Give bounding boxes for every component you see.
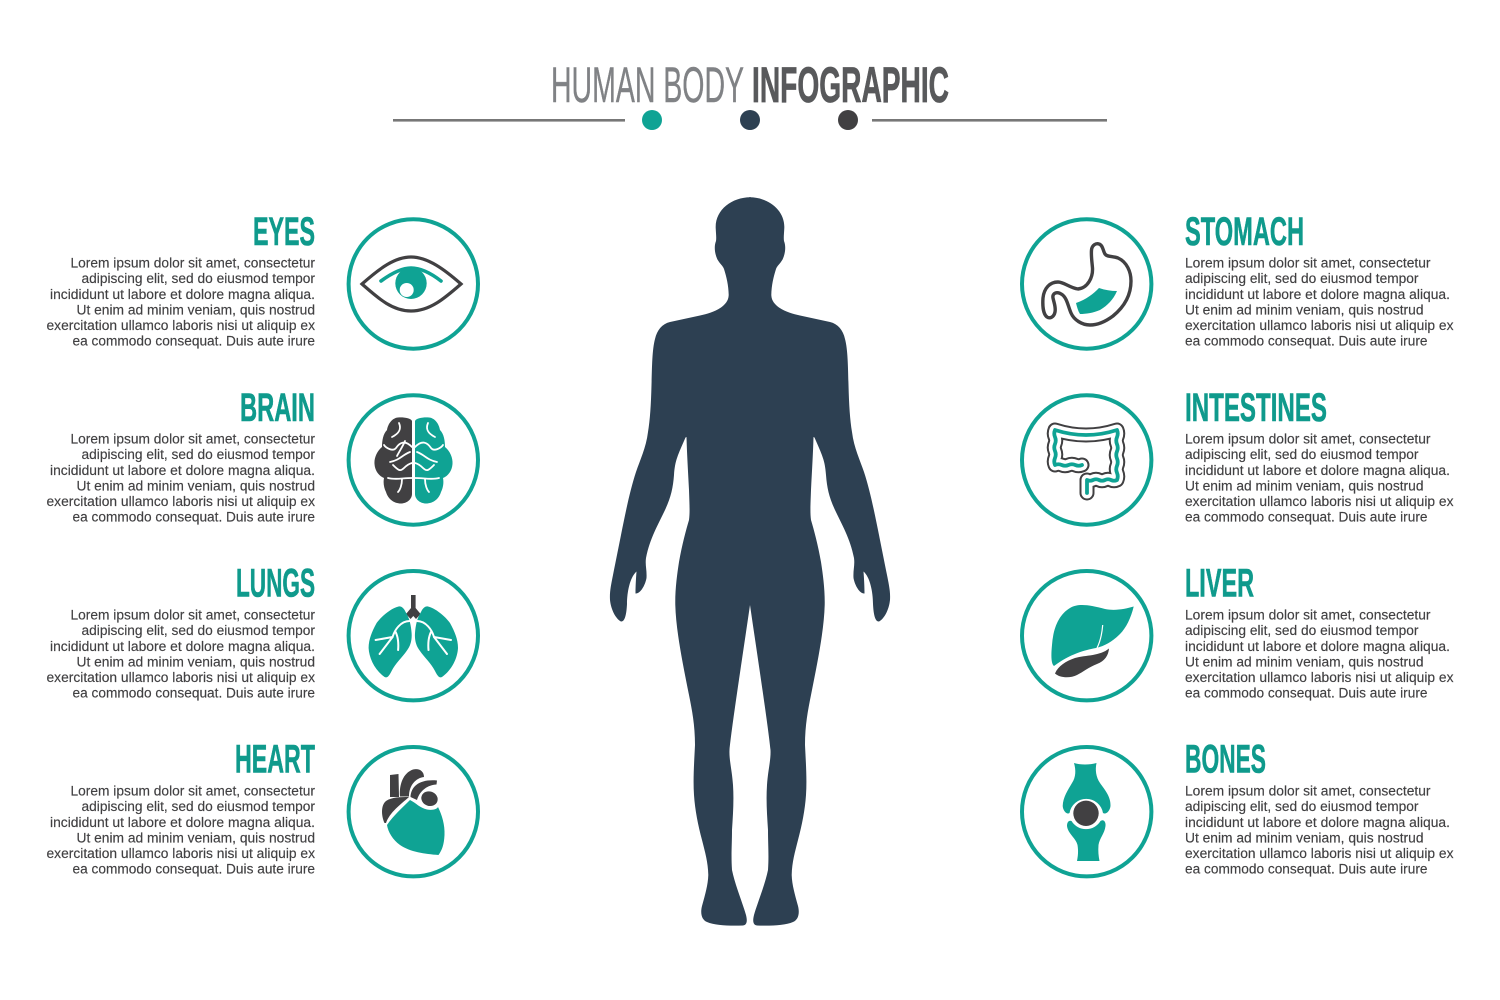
text block: stomach: ea commodo consequat. Duis aute irure [1185, 334, 1428, 349]
icon: brain [349, 395, 478, 525]
text block: intestines: exercitation ullamco laboris nisi ut aliquip ex [1185, 494, 1454, 509]
heading: heart: HEART [235, 737, 315, 781]
text block: stomach: adipiscing elit, sed do eiusmod tempor [1185, 271, 1419, 286]
icon: heart [349, 747, 478, 876]
text block: liver: Ut enim ad minim veniam, quis nostrud [1185, 654, 1424, 669]
icon: eye [349, 219, 478, 349]
text block: eyes: ea commodo consequat. Duis aute irure [72, 334, 315, 349]
text block: stomach [1185, 256, 1454, 349]
text block: liver: Lorem ipsum dolor sit amet, consectetur [1185, 608, 1431, 622]
text block: liver: exercitation ullamco laboris nisi ut aliquip ex [1185, 670, 1454, 685]
text block: liver: incididunt ut labore et dolore magna aliqua. [1185, 639, 1450, 654]
human body silhouette [610, 197, 890, 926]
panel: stomach [1022, 210, 1454, 349]
text block: intestines: Ut enim ad minim veniam, quis nostrud [1185, 478, 1424, 493]
text block: lungs: adipiscing elit, sed do eiusmod tempor [82, 623, 315, 638]
text block: bones: exercitation ullamco laboris nisi ut aliquip ex [1185, 846, 1454, 861]
panel: lungs [46, 561, 478, 701]
text block: liver: ea commodo consequat. Duis aute irure [1185, 686, 1428, 701]
text block: brain [46, 432, 316, 525]
text block: eyes: Ut enim ad minim veniam, quis nostrud [76, 302, 315, 317]
text block: bones: incididunt ut labore et dolore magna aliqua. [1185, 815, 1450, 830]
title divider with dots [393, 110, 1107, 130]
text block: heart: incididunt ut labore et dolore magna aliqua. [50, 815, 315, 830]
panel: brain [46, 386, 478, 525]
text block: stomach: Ut enim ad minim veniam, quis nostrud [1185, 302, 1424, 317]
text block: heart: Lorem ipsum dolor sit amet, consectetur [70, 784, 316, 798]
text block: bones: ea commodo consequat. Duis aute irure [1185, 862, 1428, 877]
text block: eyes [46, 256, 316, 349]
text block: heart: adipiscing elit, sed do eiusmod tempor [82, 799, 315, 814]
text block: liver [1185, 608, 1454, 701]
text block: bones [1185, 784, 1454, 877]
title: INFOGRAPHIC [752, 57, 949, 113]
text block: brain: ea commodo consequat. Duis aute irure [72, 510, 315, 525]
text block: heart: ea commodo consequat. Duis aute irure [72, 862, 315, 877]
text block: lungs: incididunt ut labore et dolore magna aliqua. [50, 639, 315, 654]
icon: lungs [349, 571, 478, 700]
icon: liver [1022, 571, 1151, 700]
text block: intestines: Lorem ipsum dolor sit amet, consectetur [1185, 432, 1431, 446]
text block: bones: Ut enim ad minim veniam, quis nostrud [1185, 830, 1424, 845]
text block: heart [46, 784, 316, 877]
text block: lungs: Ut enim ad minim veniam, quis nostrud [76, 654, 315, 669]
text block: lungs: ea commodo consequat. Duis aute irure [72, 686, 315, 701]
text block: brain: Lorem ipsum dolor sit amet, consectetur [70, 432, 316, 446]
text block: brain: adipiscing elit, sed do eiusmod tempor [82, 447, 315, 462]
text block: lungs [46, 608, 316, 701]
text block: bones: Lorem ipsum dolor sit amet, consectetur [1185, 784, 1431, 798]
text block: heart: exercitation ullamco laboris nisi ut aliquip ex [46, 846, 315, 861]
text block: brain: Ut enim ad minim veniam, quis nostrud [76, 478, 315, 493]
text block: liver: adipiscing elit, sed do eiusmod tempor [1185, 623, 1419, 638]
text block: brain: exercitation ullamco laboris nisi ut aliquip ex [46, 494, 315, 509]
text block: brain: incididunt ut labore et dolore magna aliqua. [50, 463, 315, 478]
text block: lungs: Lorem ipsum dolor sit amet, consectetur [70, 608, 316, 622]
panel: intestines [1022, 386, 1454, 525]
heading: intestines: INTESTINES [1185, 386, 1327, 430]
heading: liver: LIVER [1185, 561, 1254, 605]
text block: bones: adipiscing elit, sed do eiusmod tempor [1185, 799, 1419, 814]
text block: stomach: incididunt ut labore et dolore magna aliqua. [1185, 287, 1450, 302]
text block: eyes: Lorem ipsum dolor sit amet, consectetur [70, 256, 316, 270]
text block: stomach: Lorem ipsum dolor sit amet, consectetur [1185, 256, 1431, 270]
icon: stomach [1022, 219, 1151, 349]
panel: bones [1022, 737, 1454, 877]
icon: bone joint [1022, 747, 1151, 876]
text block: eyes: adipiscing elit, sed do eiusmod tempor [82, 271, 315, 286]
panel: liver [1022, 561, 1454, 701]
heading: stomach: STOMACH [1185, 210, 1304, 254]
text block: intestines: ea commodo consequat. Duis aute irure [1185, 510, 1428, 525]
panel: heart [46, 737, 478, 877]
panel: eyes [46, 210, 478, 349]
heading: bones: BONES [1185, 737, 1266, 781]
heading: lungs: LUNGS [236, 561, 315, 605]
icon: intestines [1022, 395, 1151, 525]
text block: heart: Ut enim ad minim veniam, quis nostrud [76, 830, 315, 845]
heading: eyes: EYES [253, 210, 315, 254]
text block: intestines: adipiscing elit, sed do eiusmod tempor [1185, 447, 1419, 462]
text block: eyes: incididunt ut labore et dolore magna aliqua. [50, 287, 315, 302]
text block: eyes: exercitation ullamco laboris nisi ut aliquip ex [46, 318, 315, 333]
heading: brain: BRAIN [240, 386, 315, 430]
text block: intestines: incididunt ut labore et dolore magna aliqua. [1185, 463, 1450, 478]
text block: intestines [1185, 432, 1454, 525]
text block: stomach: exercitation ullamco laboris nisi ut aliquip ex [1185, 318, 1454, 333]
text block: lungs: exercitation ullamco laboris nisi ut aliquip ex [46, 670, 315, 685]
title: HUMAN BODY [551, 57, 744, 113]
